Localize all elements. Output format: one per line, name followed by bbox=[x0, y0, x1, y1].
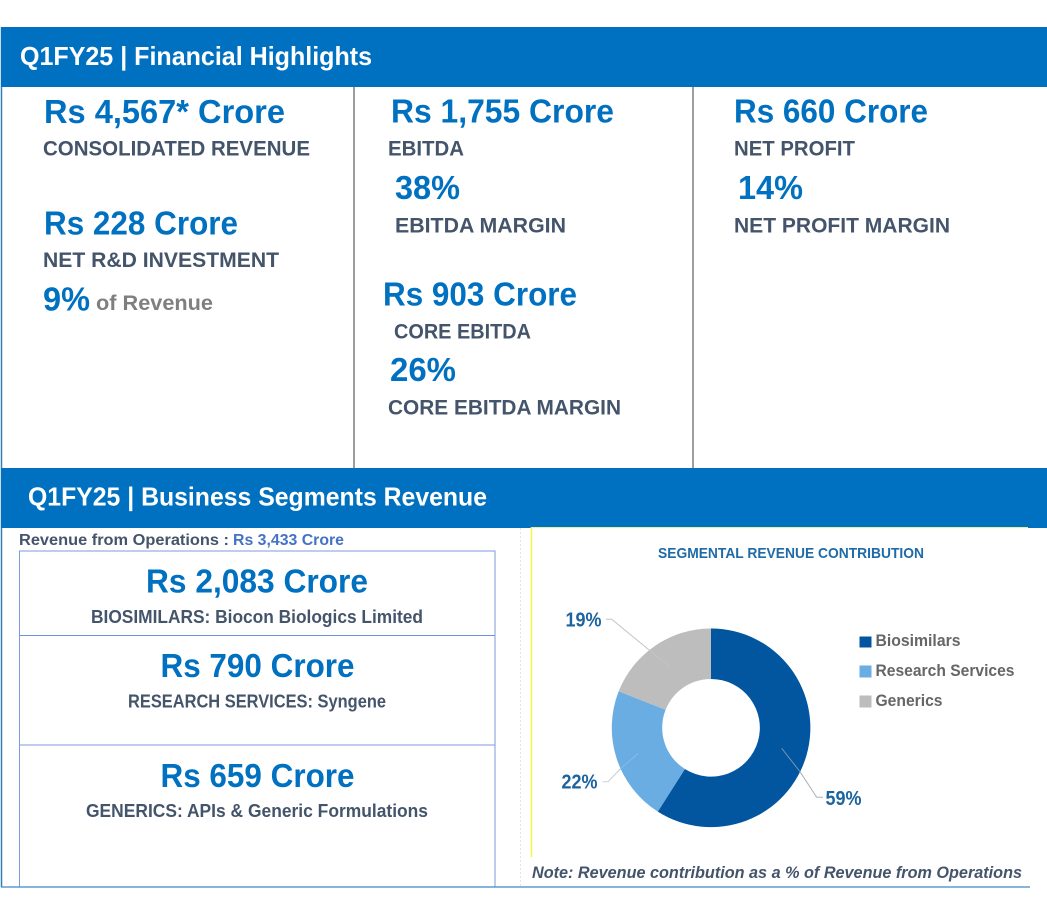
column: net profit: Rs 660 Crore bbox=[734, 92, 928, 130]
panel: financial highlights bbox=[1, 27, 1047, 468]
column: revenue and R&D: NET R&D INVESTMENT bbox=[43, 249, 279, 272]
segment: biosimilars: Rs 2,083 Crore bbox=[146, 562, 368, 600]
segment: generics: GENERICS: APIs & Generic Formulations bbox=[86, 800, 428, 821]
data labels: 22% bbox=[562, 772, 598, 794]
column: EBITDA: CORE EBITDA bbox=[394, 320, 531, 344]
text: revenue from operations: Revenue from Operations : bbox=[19, 532, 229, 549]
segment: research services bbox=[128, 647, 386, 712]
text: revenue from operations: Rs 3,433 Crore bbox=[233, 532, 344, 549]
segment: research services: Rs 790 Crore bbox=[160, 647, 354, 684]
segment: generics: Rs 659 Crore bbox=[160, 757, 354, 794]
heading band: financial highlights: Q1FY25 | Financial Highlights bbox=[20, 41, 372, 71]
text: revenue from operations bbox=[19, 532, 344, 549]
donut bbox=[612, 628, 810, 827]
data labels bbox=[562, 610, 862, 810]
segment: biosimilars bbox=[91, 562, 423, 627]
data labels: 59% bbox=[826, 788, 862, 810]
segment table bbox=[20, 551, 495, 887]
column: revenue and R&D bbox=[43, 93, 310, 318]
panel: donut chart bbox=[531, 527, 1028, 882]
heading band: financial highlights bbox=[1, 27, 1047, 87]
data labels: 19% bbox=[566, 610, 602, 632]
column: revenue and R&D: Rs 228 Crore bbox=[44, 204, 238, 242]
column: net profit: 14% bbox=[738, 169, 803, 206]
heading band: business segments: Q1FY25 | Business Segments Revenue bbox=[28, 482, 487, 512]
segment: biosimilars: BIOSIMILARS: Biocon Biologics Limited bbox=[91, 606, 423, 627]
legend: Generics bbox=[876, 692, 942, 710]
column: EBITDA: 26% bbox=[390, 351, 456, 388]
note: Note: Revenue contribution as a % of Revenue from Operations bbox=[532, 864, 1022, 882]
column: EBITDA: Rs 1,755 Crore bbox=[391, 92, 614, 130]
column: EBITDA bbox=[383, 92, 621, 420]
column: revenue and R&D: 9% bbox=[43, 280, 90, 318]
column: revenue and R&D: CONSOLIDATED REVENUE bbox=[43, 138, 310, 160]
segment: generics bbox=[86, 757, 428, 821]
legend: Biosimilars bbox=[876, 632, 960, 650]
column: EBITDA: EBITDA bbox=[388, 138, 464, 160]
leader lines bbox=[603, 619, 823, 797]
chart title: SEGMENTAL REVENUE CONTRIBUTION bbox=[658, 545, 924, 562]
legend: Research Services bbox=[876, 662, 1014, 680]
column: EBITDA: 38% bbox=[395, 169, 460, 206]
column: revenue and R&D: Rs 4,567* Crore bbox=[44, 93, 285, 130]
column: EBITDA: CORE EBITDA MARGIN bbox=[388, 396, 621, 420]
panel: business segments bbox=[1, 468, 1047, 887]
column: net profit bbox=[734, 92, 950, 238]
segment: research services: RESEARCH SERVICES: Syngene bbox=[128, 690, 386, 712]
legend bbox=[860, 632, 1014, 710]
column: EBITDA: EBITDA MARGIN bbox=[395, 214, 566, 238]
column: EBITDA: Rs 903 Crore bbox=[383, 276, 577, 312]
column: revenue and R&D: of Revenue bbox=[96, 291, 213, 315]
column: net profit: NET PROFIT bbox=[734, 138, 855, 160]
heading band: business segments bbox=[1, 468, 1047, 528]
column: net profit: NET PROFIT MARGIN bbox=[734, 214, 950, 238]
